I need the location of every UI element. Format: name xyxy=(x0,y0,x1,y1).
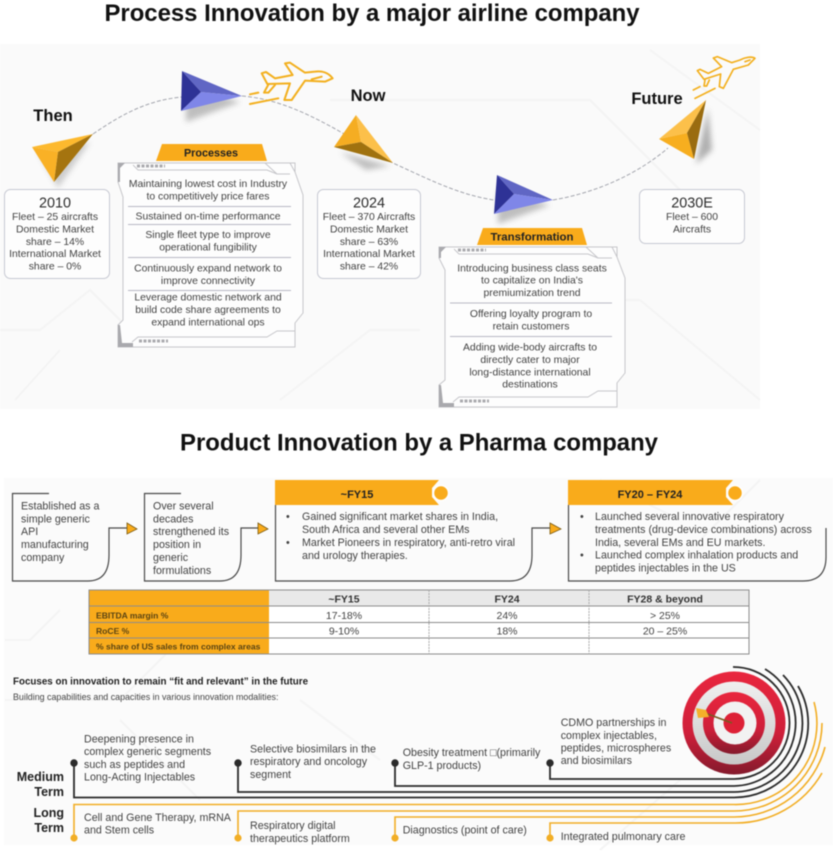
text: CDMO: and biosimilars xyxy=(561,755,632,767)
card: 2010: Domestic Market xyxy=(16,224,94,236)
card: 2030E: 2030E xyxy=(671,196,713,212)
panel: processes: build code share agreements to xyxy=(135,305,281,316)
table: financial metrics: 24% xyxy=(496,610,518,622)
text: diagnostics: Diagnostics (point of care) xyxy=(403,824,527,836)
label: Long Term: Long xyxy=(33,806,64,820)
panel: transformation: to capitalize on India's xyxy=(481,276,583,287)
card: 2010: Fleet – 25 aircrafts xyxy=(12,212,98,223)
text: obesity: GLP-1 products) xyxy=(403,760,481,772)
heading: transformation: Transformation xyxy=(491,232,573,244)
text: obesity xyxy=(403,747,541,772)
heading: future focus: Focuses on innovation to remain “fit and relevant” in the future xyxy=(13,676,309,688)
step: generic API company: manufacturing xyxy=(21,539,89,551)
text: CDMO: CDMO partnerships in xyxy=(561,717,666,729)
title: process innovation: Process Innovation by a major airline company xyxy=(104,0,640,27)
card: 2030E: Aircrafts xyxy=(673,224,711,236)
card: 2024: share – 63% xyxy=(340,237,398,248)
table: financial metrics: FY28 & beyond xyxy=(627,593,703,605)
step: FY20-FY24 xyxy=(568,480,826,581)
label: Long Term: Term xyxy=(34,821,64,835)
text: digital therapeutics: Respiratory digital xyxy=(250,820,336,832)
card: 2024 xyxy=(318,190,420,278)
step: generic formulations: strengthened its xyxy=(153,526,229,538)
text: CDMO: peptides, microspheres xyxy=(561,742,671,754)
text: complex generics: Deepening presence in xyxy=(84,734,194,746)
panel: transformation: destinations xyxy=(502,380,558,391)
panel: processes: Leverage domestic network and xyxy=(134,293,282,304)
step: generic formulations: formulations xyxy=(153,565,211,577)
timeline: medium term lines xyxy=(71,667,808,798)
step: generic API company: simple generic xyxy=(21,514,91,526)
step: generic API company xyxy=(12,494,137,581)
table: financial metrics: > 25% xyxy=(650,610,680,622)
table: financial metrics: 17-18% xyxy=(326,610,362,622)
text: complex generics: Long-Acting Injectables xyxy=(84,772,195,784)
text: complex generics: complex generic segments xyxy=(84,746,211,758)
icon: purple marker 1 xyxy=(181,71,242,122)
step: generic formulations: decades xyxy=(153,514,193,526)
label: Medium Term: Medium xyxy=(17,770,64,784)
table: financial metrics: ~FY15 xyxy=(328,593,360,605)
panel: transformation: directly cater to major xyxy=(480,355,580,366)
table: financial metrics: EBITDA margin % xyxy=(96,610,169,620)
table: financial metrics: 18% xyxy=(496,626,518,638)
text: complex generics: such as peptides and xyxy=(84,759,185,771)
panel: transformation: premiumization trend xyxy=(483,288,581,299)
text: digital therapeutics xyxy=(250,820,350,845)
step: generic API company: Established as a xyxy=(21,500,99,512)
icon: purple marker 2 xyxy=(494,175,553,224)
heading: processes: Processes xyxy=(184,148,238,160)
stage label: Now: Now xyxy=(351,87,386,105)
panel: processes: Maintaining lowest cost in Industry xyxy=(129,179,288,190)
step: FY15: • xyxy=(286,537,290,549)
stage label: Future: Future xyxy=(631,90,683,108)
card: 2024: 2024 xyxy=(353,196,385,212)
card: 2030E xyxy=(640,190,744,244)
icon: Then marker xyxy=(32,134,93,188)
step: FY20-FY24: treatments (drug-device combinations) across xyxy=(595,524,812,536)
icon: airplane 2 xyxy=(693,57,755,98)
table: financial metrics: 9-10% xyxy=(329,626,359,638)
step: FY15: Market Pioneers in respiratory, anti-retro viral xyxy=(302,537,515,549)
step: FY20-FY24: peptides injectables in the US xyxy=(595,562,736,574)
table: financial metrics: RoCE % xyxy=(96,626,130,636)
text: CDMO: complex injectables, xyxy=(561,730,657,742)
card: 2010: 2010 xyxy=(39,196,71,212)
card: 2024: Domestic Market xyxy=(330,224,408,236)
card: 2010 xyxy=(4,190,110,278)
timeline: long term lines xyxy=(71,702,825,841)
text: pulmonary care: Integrated pulmonary care xyxy=(561,831,686,843)
step: generic API company: API xyxy=(21,526,38,538)
panel: processes: Continuously expand network to xyxy=(134,264,282,275)
heading: processes xyxy=(156,144,267,161)
card: 2024: share – 42% xyxy=(340,262,398,272)
text: biosimilars xyxy=(250,744,376,781)
heading: transformation xyxy=(477,228,587,245)
panel: processes: Single fleet type to improve xyxy=(145,230,271,241)
table: financial metrics: % share of US sales from complex areas xyxy=(96,642,261,652)
panel: processes xyxy=(118,144,303,347)
panel: transformation xyxy=(439,228,625,407)
text: CDMO xyxy=(561,717,671,767)
text: biosimilars: segment xyxy=(250,769,291,781)
panel: processes: improve connectivity xyxy=(161,276,256,287)
step: FY20-FY24: • xyxy=(580,511,584,523)
subheading: innovation modalities: Building capabilities and capacities in various innovation modalities: xyxy=(13,692,278,702)
panel: processes: Sustained on-time performance xyxy=(136,211,281,222)
card: 2030E: Fleet – 600 xyxy=(666,212,718,223)
text: cell and gene: and Stem cells xyxy=(84,824,154,836)
icon: target xyxy=(682,672,786,774)
step: generic API company: company xyxy=(21,552,65,564)
stage label: Then: Then xyxy=(33,107,73,125)
label: Long Term xyxy=(33,806,64,835)
text: digital therapeutics: therapeutics platform xyxy=(250,833,350,845)
panel: transformation: Adding wide-body aircrafts to xyxy=(463,343,597,354)
step: FY15: ~FY15 xyxy=(341,489,373,501)
panel: transformation: Offering loyalty program to xyxy=(470,309,592,320)
card: 2024: Fleet – 370 Aircrafts xyxy=(323,212,415,223)
table: financial metrics: FY24 xyxy=(494,593,520,605)
step: FY15 xyxy=(275,480,561,581)
step: generic formulations: Over several xyxy=(153,500,214,512)
label: Medium Term xyxy=(17,770,64,799)
step: FY20-FY24: Launched several innovative respiratory xyxy=(595,511,785,523)
icon: Future marker xyxy=(659,100,712,164)
title: product innovation: Product Innovation by a Pharma company xyxy=(180,430,659,456)
step: FY15: Gained significant market shares in India, xyxy=(302,511,498,523)
step: FY20-FY24: FY20 – FY24 xyxy=(618,489,683,501)
table: financial metrics xyxy=(89,590,749,654)
step: FY20-FY24: India, several EMs and EU markets. xyxy=(595,537,765,549)
label: Medium Term: Term xyxy=(34,785,64,799)
text: obesity: Obesity treatment □(primarily xyxy=(403,747,541,759)
panel: processes: operational fungibility xyxy=(159,242,258,253)
flight path xyxy=(93,96,668,200)
icon: Now marker xyxy=(334,115,393,170)
step: FY15: and urology therapies. xyxy=(302,550,408,562)
step: generic formulations: position in xyxy=(153,539,201,551)
text: cell and gene: Cell and Gene Therapy, mRNA xyxy=(84,812,232,824)
icon: airplane 1 xyxy=(250,63,333,104)
panel: processes: expand international ops xyxy=(151,317,265,328)
step: FY15: South Africa and several other EMs xyxy=(302,524,470,536)
step: FY20-FY24: • xyxy=(580,550,584,562)
panel: transformation: retain customers xyxy=(493,321,569,332)
step: FY15: • xyxy=(286,511,290,523)
panel: transformation: Introducing business class seats xyxy=(457,263,607,274)
card: 2024: International Market xyxy=(323,249,415,260)
card: 2010: share – 0% xyxy=(29,262,81,272)
text: biosimilars: Selective biosimilars in the xyxy=(250,744,376,756)
panel: transformation: long-distance international xyxy=(469,367,591,378)
step: FY20-FY24: Launched complex inhalation products and xyxy=(595,550,798,562)
text: complex generics xyxy=(84,734,211,784)
text: cell and gene xyxy=(84,812,232,836)
panel: processes: to competitively price fares xyxy=(146,191,270,202)
text: biosimilars: respiratory and oncology xyxy=(250,756,368,768)
step: generic formulations xyxy=(144,494,268,581)
step: generic formulations: generic xyxy=(153,552,189,564)
card: 2010: share – 14% xyxy=(26,237,84,248)
table: financial metrics: 20 – 25% xyxy=(643,626,687,638)
card: 2010: International Market xyxy=(9,249,101,260)
